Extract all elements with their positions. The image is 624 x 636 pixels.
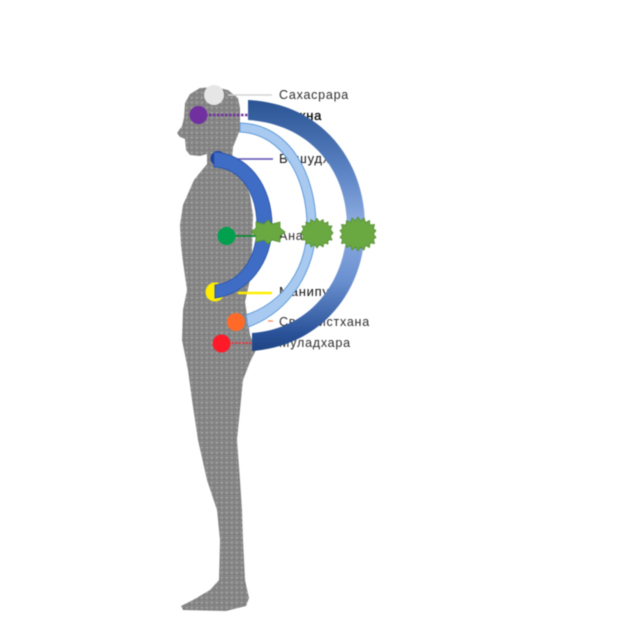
label: Свадхистхана: Свадхистхана: [279, 315, 370, 329]
label: Муладхара: Муладхара: [279, 336, 351, 350]
arc: inner energy channel: [214, 152, 272, 298]
star: middle arc node: [301, 218, 333, 248]
arc: middle energy channel: [240, 123, 316, 327]
arc: outer energy channel: [248, 100, 365, 351]
human silhouette in profile: [177, 87, 256, 611]
line: Манипура connector: [238, 292, 272, 294]
line: Вишудха connector: [222, 158, 273, 160]
chakra: Вишудха: [210, 151, 226, 166]
line: Сахасрара connector: [228, 94, 272, 96]
line: Муладхара connector: [228, 342, 254, 344]
chakra: Свадхистхана: [227, 313, 245, 331]
chakra: Муладхара: [212, 334, 230, 352]
label: Манипура: Манипура: [279, 284, 346, 299]
star: outer arc node: [340, 217, 376, 251]
line: Аджна connector: [205, 114, 250, 116]
label: Анахата: Анахата: [279, 229, 332, 243]
line: Анахата connector: [232, 235, 258, 237]
star: inner arc node: [251, 220, 285, 244]
line: Свадхистхана connector: [268, 320, 273, 322]
label: Аджна: Аджна: [279, 108, 322, 123]
label: Вишудха: Вишудха: [279, 151, 338, 166]
chakra: Сахасрара: [204, 85, 224, 105]
chakra: Манипура: [206, 282, 224, 302]
label: Сахасрара: Сахасрара: [279, 88, 349, 102]
chakra: Аджна: [190, 106, 208, 124]
chakra: Анахата: [218, 227, 236, 245]
